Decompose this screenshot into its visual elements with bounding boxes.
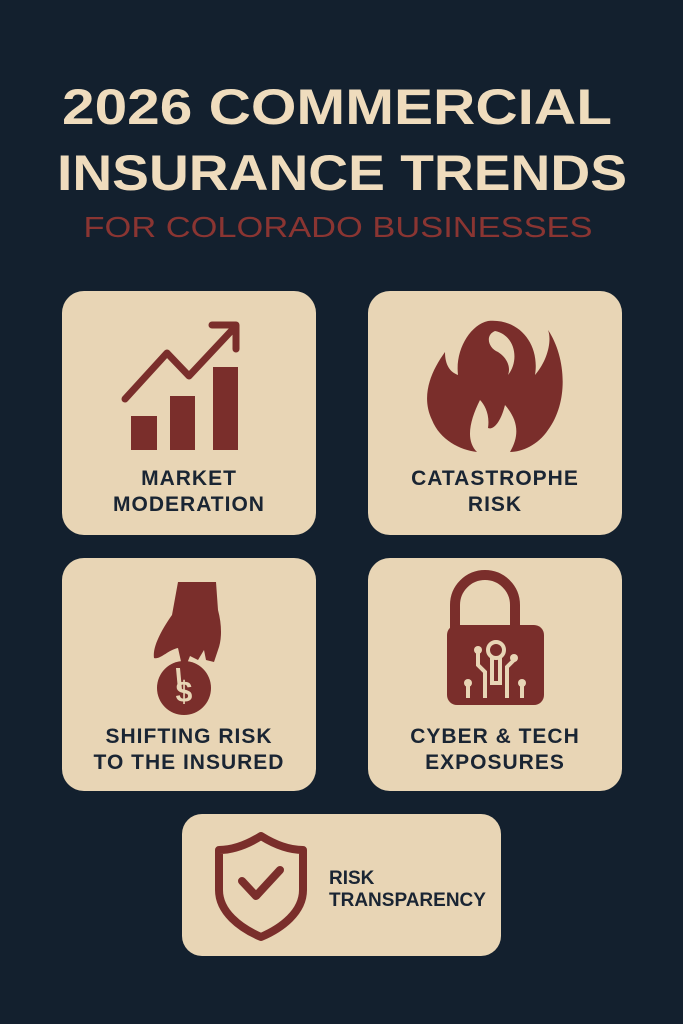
label: TO THE INSURED <box>94 751 284 774</box>
label: SHIFTING RISK <box>105 725 273 748</box>
icon: hand with coin: $ <box>176 676 193 709</box>
title: 2026 COMMERCIAL <box>62 79 612 135</box>
panel: cyber <box>368 558 622 791</box>
label: MARKET <box>141 467 237 490</box>
panel: market moderation <box>62 291 316 535</box>
icon: circuit lock <box>447 575 544 705</box>
label: CYBER & TECH <box>410 725 580 748</box>
label: RISK <box>468 493 522 516</box>
icon: shield check <box>219 836 303 937</box>
label: EXPOSURES <box>425 751 565 774</box>
icon: bar chart <box>125 325 238 450</box>
subtitle: FOR COLORADO BUSINESSES <box>84 212 592 244</box>
panel: risk transparency <box>182 814 501 956</box>
panel: shifting risk <box>62 558 316 791</box>
icon: hand with coin <box>154 582 221 715</box>
label: MODERATION <box>113 493 265 516</box>
label: TRANSPARENCY <box>329 890 486 911</box>
title: INSURANCE TRENDS <box>57 145 627 201</box>
title <box>57 79 627 201</box>
icon: flame <box>427 321 563 452</box>
label: RISK <box>329 868 375 889</box>
label: CATASTROPHE <box>411 467 579 490</box>
panel: catastrophe risk <box>368 291 622 535</box>
